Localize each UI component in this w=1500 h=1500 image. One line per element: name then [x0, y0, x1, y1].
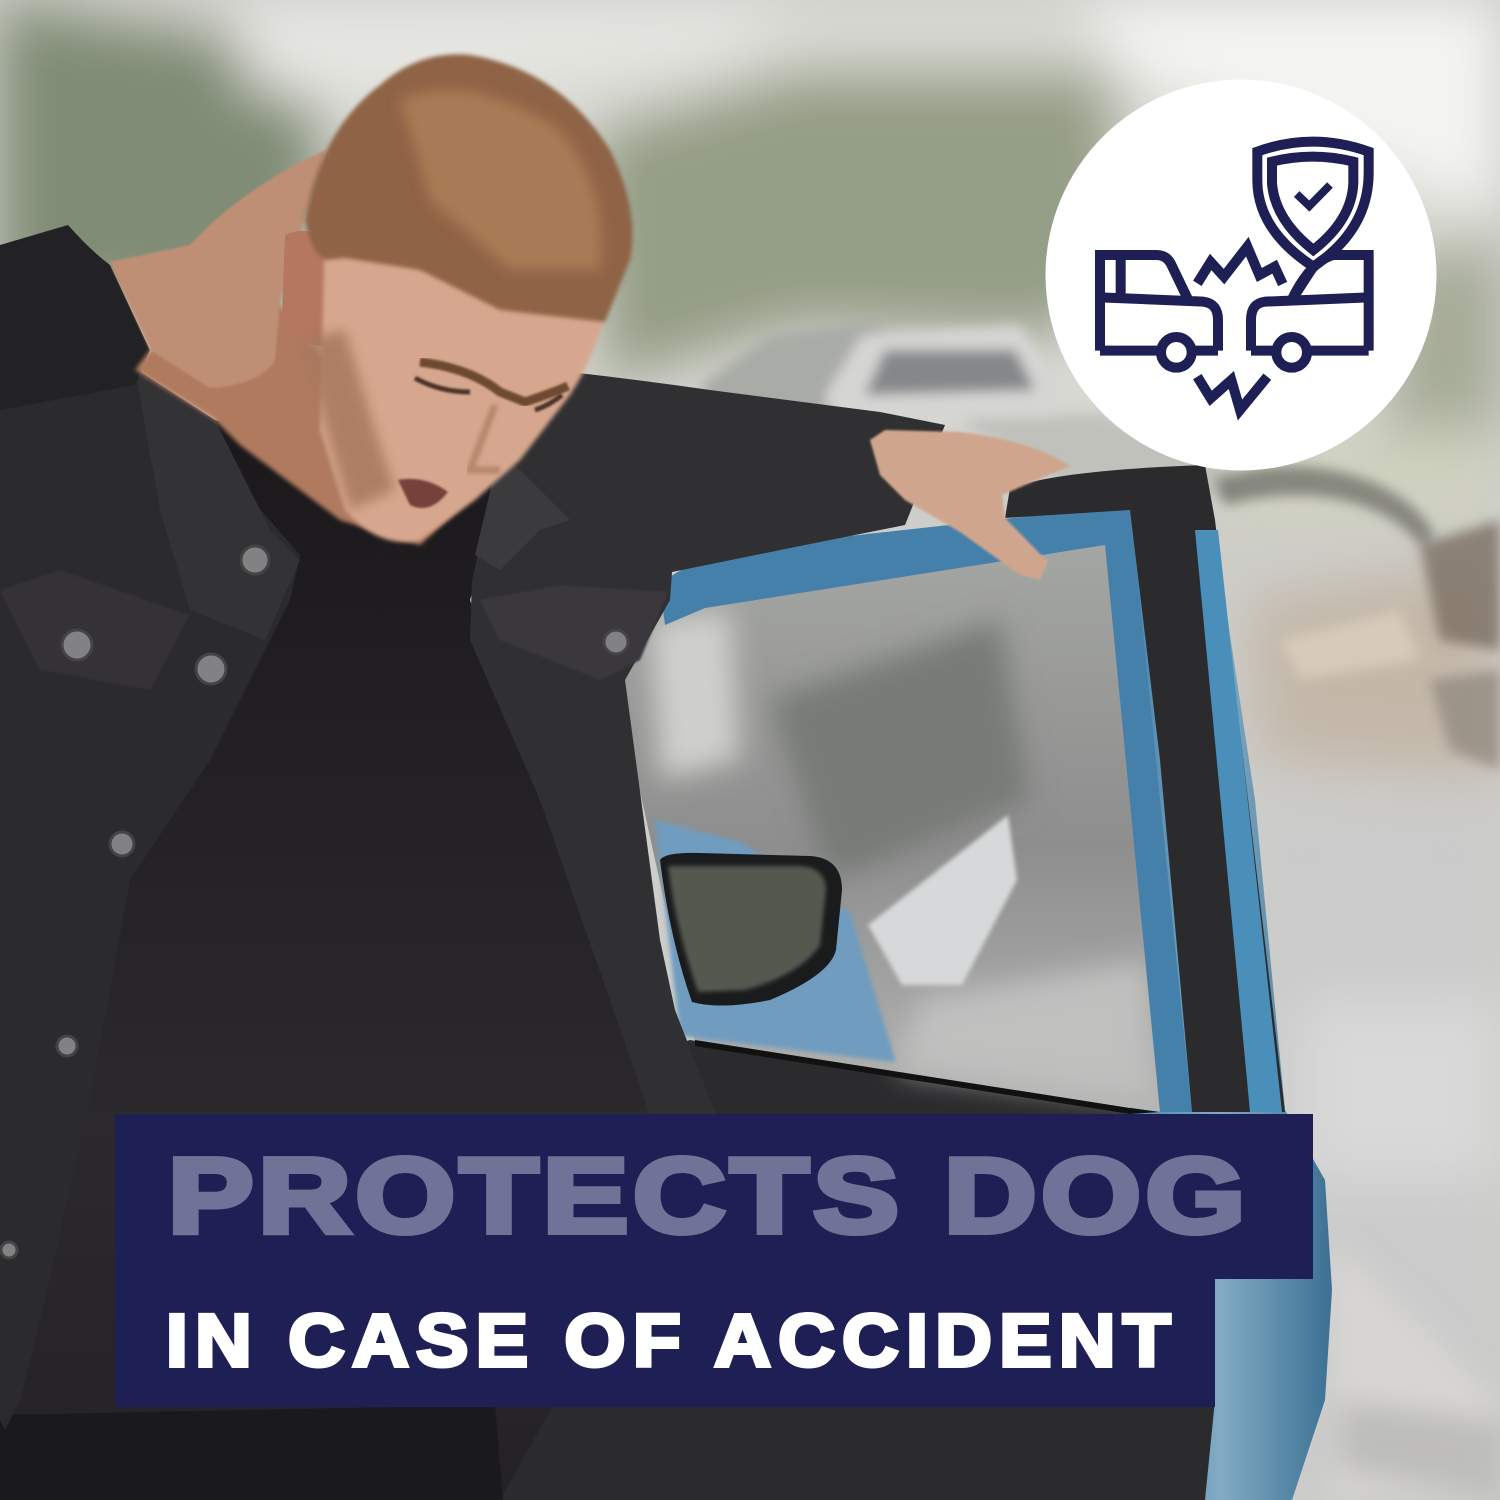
sleeve of the raised arm	[0, 225, 150, 410]
black T-shirt	[0, 420, 716, 1500]
upper impact spark	[1197, 247, 1283, 284]
nose shadow	[470, 405, 500, 470]
door outer skin	[1110, 470, 1332, 1500]
car door	[480, 465, 1332, 1500]
right car	[1251, 255, 1369, 368]
jacket collar right	[475, 450, 570, 570]
ear	[282, 231, 332, 346]
hand behind neck	[110, 150, 325, 388]
trousers	[0, 1405, 503, 1500]
eyes	[415, 378, 562, 410]
eyebrows	[420, 362, 568, 402]
door interior panel	[480, 1040, 1215, 1500]
lower window seal	[695, 1040, 1160, 1114]
stubble and cheek shadow	[300, 330, 395, 510]
shield inner	[1272, 157, 1353, 250]
lower impact spark	[1197, 377, 1267, 410]
hand on door	[870, 430, 1070, 580]
headline banner	[115, 1114, 1313, 1407]
neck	[135, 300, 500, 545]
jacket pocket flap	[0, 570, 190, 690]
icon: crash and shield	[1100, 142, 1369, 410]
background parked cars	[700, 320, 1240, 500]
wing mirror	[660, 853, 842, 1006]
hair	[305, 54, 632, 322]
headline line 1: PROTECTS DOG	[168, 1137, 1250, 1255]
jacket right side and sleeve	[470, 372, 945, 1115]
road stripe in the smoke	[1330, 1240, 1500, 1500]
black door seal	[1005, 465, 1285, 1112]
hair highlight	[400, 90, 602, 270]
jacket buttons	[1, 546, 628, 1258]
background wreck on the right	[1215, 466, 1500, 770]
check mark	[1297, 185, 1330, 206]
jacket chest pocket	[480, 585, 668, 680]
face	[320, 230, 610, 542]
window frame in blue	[660, 505, 1192, 1112]
jacket left side	[0, 368, 300, 1430]
haze through the window	[650, 610, 1150, 1100]
headline line 2: IN CASE OF ACCIDENT	[166, 1299, 1178, 1382]
door window	[610, 520, 1160, 1112]
jacket collar	[135, 368, 300, 640]
icon badge: white circle with crash and shield	[1046, 80, 1436, 470]
man	[0, 54, 1070, 1500]
mouth	[398, 479, 448, 508]
link from shield to right car	[1292, 267, 1313, 300]
airbag debris	[868, 815, 1017, 985]
blue car visible through window	[655, 820, 896, 1062]
left car	[1100, 255, 1218, 368]
shield outer	[1257, 142, 1369, 267]
